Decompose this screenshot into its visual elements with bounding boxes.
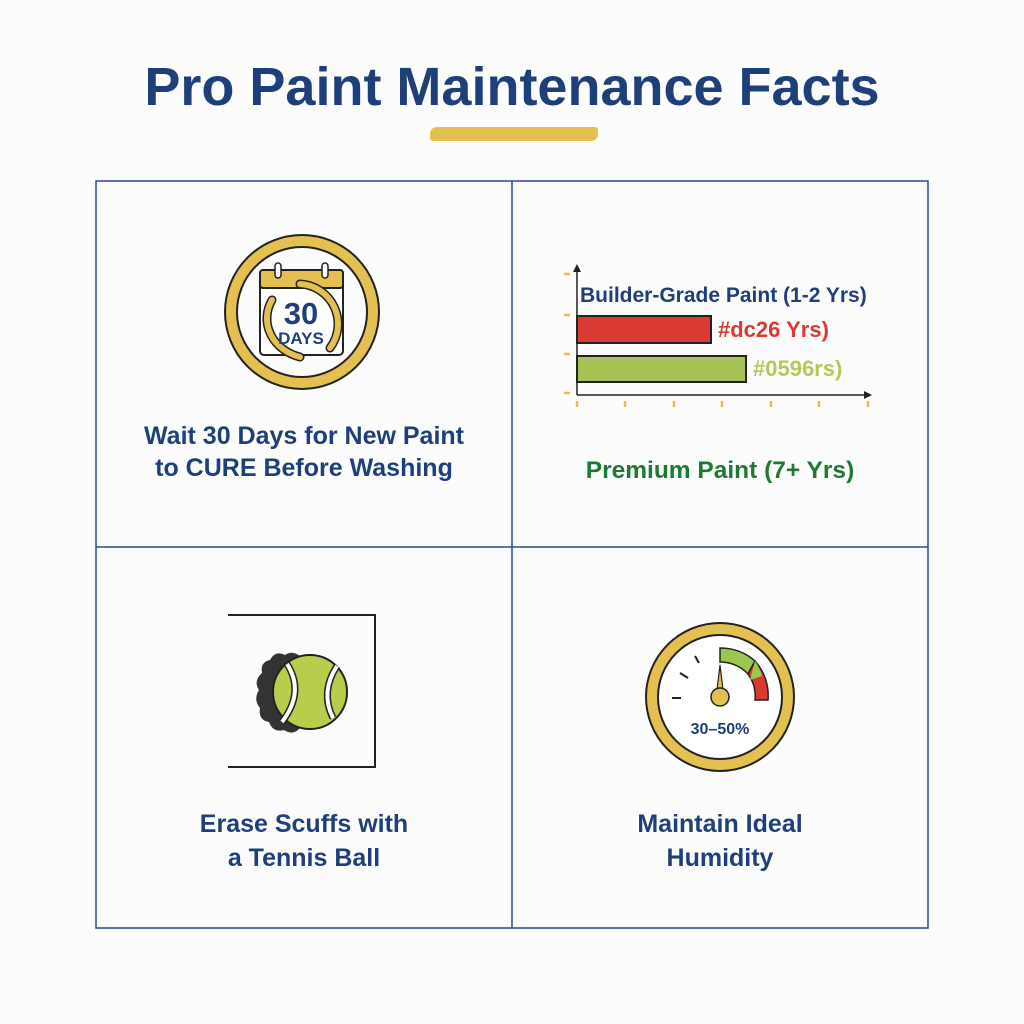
title underline bbox=[430, 127, 598, 141]
text: wait 30 days: to CURE Before Washing bbox=[155, 454, 453, 482]
icon: humidity gauge: 30–50% bbox=[691, 721, 749, 738]
text: premium paint: Premium Paint (7+ Yrs) bbox=[586, 457, 854, 484]
bar chart bbox=[564, 264, 872, 407]
icon: tennis ball bbox=[228, 615, 375, 767]
bar chart: #dc26 Yrs) bbox=[718, 317, 829, 342]
text: wait 30 days bbox=[144, 422, 464, 482]
title: Pro Paint Maintenance Facts bbox=[144, 57, 880, 117]
text: humidity: Maintain Ideal bbox=[637, 810, 803, 838]
text: wait 30 days: Wait 30 Days for New Paint bbox=[144, 422, 464, 450]
text: tennis ball bbox=[200, 810, 408, 872]
bar chart: #0596rs) bbox=[753, 356, 842, 381]
bar chart: Builder-Grade Paint (1-2 Yrs) bbox=[580, 284, 867, 307]
text: tennis ball: Erase Scuffs with bbox=[200, 810, 408, 838]
text: humidity bbox=[637, 810, 803, 872]
icon: calendar 30 days: 30 bbox=[284, 296, 318, 331]
text: humidity: Humidity bbox=[667, 844, 773, 872]
text: tennis ball: a Tennis Ball bbox=[228, 844, 380, 872]
icon: calendar 30 days bbox=[231, 241, 373, 383]
icon: humidity gauge bbox=[652, 629, 788, 765]
icon: calendar 30 days: DAYS bbox=[278, 329, 324, 348]
